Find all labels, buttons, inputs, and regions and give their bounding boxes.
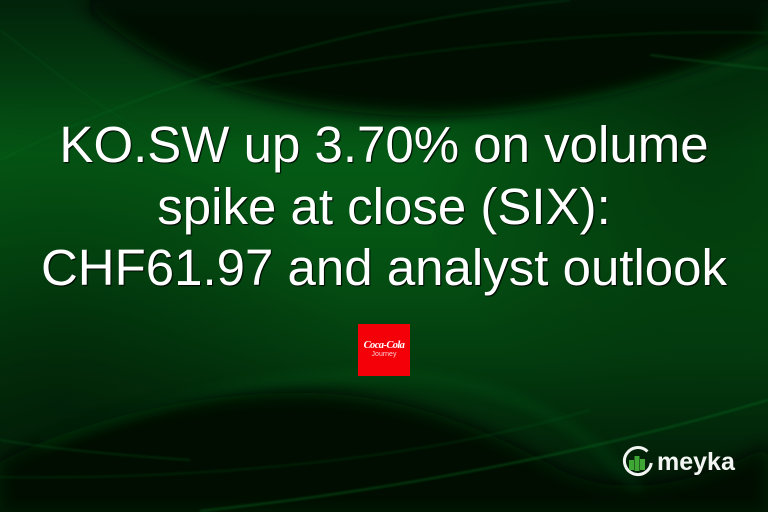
icon: Meyka ring with bars xyxy=(622,446,653,476)
title: spike at close (SIX): xyxy=(157,178,611,234)
icon: Coca-Cola Journey logo: Journey xyxy=(372,351,396,358)
icon: Coca-Cola Journey logo: Coca-Cola xyxy=(364,340,404,351)
icon: Coca-Cola Journey logo xyxy=(358,324,410,376)
title xyxy=(41,116,728,297)
Meyka brand logo xyxy=(622,446,736,476)
title: CHF61.97 and analyst outlook xyxy=(41,239,727,296)
title: KO.SW up 3.70% on volume xyxy=(59,116,709,173)
brand name: meyka xyxy=(657,448,735,476)
